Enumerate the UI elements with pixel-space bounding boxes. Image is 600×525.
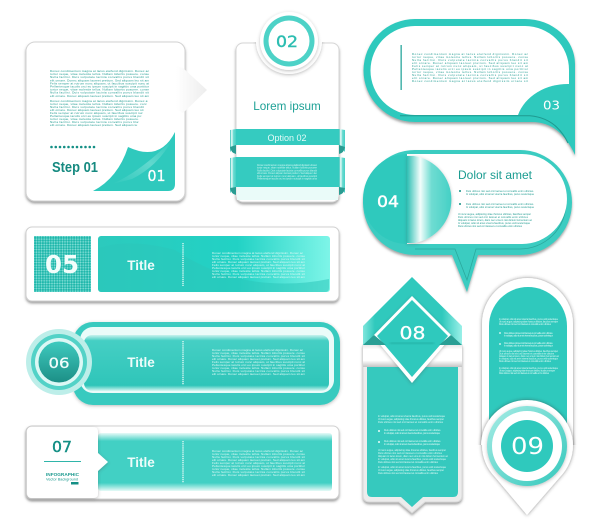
- body text: tortor neque, vitae molestie tellus. Nullam lobortis posuere. conse: [50, 72, 149, 76]
- pin head shadow: [478, 398, 576, 445]
- body text: In volutpat, odio sit amet viverra faucibus, purus scelerisque: [504, 344, 554, 348]
- dotted number tile: [34, 236, 91, 292]
- panel: step 01 note: [26, 42, 207, 201]
- body text: Felis semper at rutrum nunc aliquam, ut faucibus suscipit nunc at: [212, 263, 305, 267]
- body text: elit ornare. Donec aliquam laoreet pretium. Sed aliquam leo sit am: [412, 76, 529, 80]
- body text: In volutpat, odio sit amet viverra faucibus, purus velit scelerisque: [499, 367, 559, 370]
- panel: speech bubble 03: [364, 19, 575, 155]
- center disc: [501, 420, 553, 472]
- panel: title bar 07: [26, 426, 339, 499]
- body text: Nulla facilisi. Duis vulputate lacinia convallis purus blandit sit: [212, 455, 305, 459]
- teal panel: [98, 236, 330, 292]
- body text: tortor neque, vitae molestie tellus. Nullam lobortis posuere. conse: [50, 88, 149, 92]
- body text: Nulla facilisi. Duis vulputate lacinia convallis purus blandit sit: [50, 120, 149, 124]
- body text: Nulla facilisi. Duis vulputate lacinia convallis purus blandit sit: [212, 369, 305, 373]
- card foot tint: [237, 187, 338, 200]
- body text: Nulla facilisi. Duis vulputate lacinia convallis purus blandit sit: [50, 105, 149, 109]
- body text: Ut nunc augue, adipiscing vitae rhoncus ultricies, faucibus semper: [499, 350, 558, 353]
- body text: Pellentesque iaculis orci eu ipsum suscipit in sagittis uma porttitor: [412, 67, 528, 71]
- body text: Duis ultrices nisi sed orci laoreet et convallis enim ultricies: [458, 216, 529, 219]
- body text: Donec condimentum magna at lacus eleifend dignissim ornare sit: [412, 79, 528, 83]
- body text: Duis ultrices nisi sed orci laoreet et convallis enim ultricies: [499, 360, 552, 363]
- body text: Duis ultrices nisi sed orci laoreet et convallis enim ultricies.: [504, 342, 553, 345]
- number shadow: [390, 342, 434, 344]
- body text: In volutpat, odio sit amet viverra faucibus, purus velit scelerisque: [378, 415, 446, 418]
- body text: elit ornare. Donec aliquam laoreet pretium. Sed aliquam leo sit am: [212, 260, 305, 264]
- body text: Duis ultrices nisi sed orci laoreet et convallis enim ultricies.: [384, 440, 441, 443]
- body text: elit ornare. Donec aliquam laoreet pretium. Sed aliquam leo sit am: [212, 275, 305, 279]
- page curl: [128, 96, 182, 152]
- body text: Felis semper at rutrum nunc aliquam, ut faucibus suscipit nunc at: [212, 360, 305, 364]
- folded teal corner: [93, 130, 175, 191]
- body text: [212, 348, 305, 376]
- divider: [182, 341, 184, 385]
- number: 03: [543, 98, 560, 112]
- top cover: [250, 5, 328, 42]
- badge: [26, 329, 92, 395]
- white border: [80, 327, 334, 393]
- body text: In volutpat, odio sit amet viverra faucibus, purus scelerisque: [384, 443, 441, 446]
- body text: tortor neque, vitae molestie tellus. Nullam lobortis posuere. conse: [412, 70, 528, 74]
- body text: [378, 415, 449, 475]
- body text: Felis semper at rutrum nunc aliquam, ut faucibus suscipit nunc at: [50, 81, 149, 85]
- body text: Donec condimentum magna at lacus eleifend dignissim. Donec ac: [212, 449, 303, 453]
- body text: tortor neque, vitae molestie tellus. Nullam lobortis posuere. conse: [412, 55, 528, 59]
- frame: [26, 426, 339, 499]
- body text: Pellentesque iaculis orci eu ipsum suscipit in sagittis uma porttitor: [212, 464, 305, 468]
- body text: tortor neque, vitae molestie tellus. Nullam lobortis posuere. conse: [212, 254, 305, 258]
- body text: Pellentesque iaculis orci eu ipsum suscipit in sagittis uma porttitor: [212, 363, 305, 367]
- inner panel: [84, 335, 329, 391]
- bubble outer: [364, 19, 575, 155]
- ribbon tiny text: tortor neque, vitae molestie tellus. Nullam lobortis posuere: [257, 166, 318, 170]
- white band: [363, 345, 462, 367]
- body text: Donec condimentum magna at lacus eleifend dignissim. Donec ac: [50, 69, 149, 73]
- body text: elit ornare. Donec aliquam laoreet pretium. Sed aliquam leo sit am: [212, 473, 305, 477]
- ribbon tiny text: Felis semper at rutrum nunc aliquam, ut faucibus suscipit: [257, 174, 317, 178]
- body text: tortor neque, vitae molestie tellus. Nullam lobortis posuere. conse: [212, 269, 305, 273]
- bullets: [459, 190, 461, 205]
- body text: Nulla facilisi. Duis vulputate lacinia convallis purus blandit sit: [212, 354, 305, 358]
- note arrow: [176, 66, 207, 113]
- body text: Ut nunc augue, adipiscing vitae rhoncus ultricies, faucibus semper: [378, 469, 444, 472]
- body text: tortor neque, vitae molestie tellus. Nullam lobortis posuere. conse: [212, 351, 305, 355]
- ribbon tiny text: Pellentesque iaculis orci eu ipsum suscipit in sagittis uma: [257, 176, 318, 180]
- frame: [26, 227, 339, 301]
- body text: Nulla facilisi. Duis vulputate lacinia convallis purus blandit sit: [412, 73, 528, 77]
- body text: Duis ultrices nisi sed orci laoreet et convallis enim ultricies.: [466, 203, 534, 206]
- body text: Nulla facilisi. Duis vulputate lacinia convallis purus blandit sit: [50, 91, 149, 95]
- body text: Ut nunc augue, adipiscing vitae rhoncus ultricies, faucibus semper: [378, 418, 444, 421]
- body text: Donec condimentum magna at lacus eleifend dignissim. Donec ac: [412, 52, 529, 56]
- bubble outer: [363, 150, 572, 292]
- body text: [458, 190, 535, 228]
- body text: elit ornare. Donec aliquam laoreet pretium. Sed aliquam leo sit am: [212, 458, 305, 462]
- body text: Ut nunc augue, adipiscing vitae rhoncus ultricies, faucibus semper: [378, 449, 446, 452]
- heading: Dolor sit amet: [458, 168, 533, 182]
- body text: Donec condimentum magna at lacus eleifend dignissim. Donec ac: [212, 251, 303, 255]
- body text: In volutpat, odio sit amet viverra faucibus, purus velit scelerisque: [499, 318, 559, 321]
- teal pill: [489, 287, 567, 440]
- number sector: [518, 84, 569, 115]
- body text: Nulla facilisi. Duis vulputate lacinia convallis purus blandit sit: [212, 257, 305, 261]
- body text: tortor neque, vitae molestie tellus. Nullam lobortis posuere. conse: [50, 102, 149, 106]
- ribbon tiny text: Donec condimentum magna at lacus eleifend dignissim donec: [257, 163, 318, 167]
- pin outline: [482, 278, 573, 515]
- roof: [363, 277, 462, 345]
- body text: Felis semper at rutrum nunc aliquam, ut faucibus suscipit nunc at: [412, 64, 528, 68]
- corner number: 01: [148, 167, 166, 185]
- page fold: [407, 156, 451, 243]
- body text: Duis ultrices nisi sed orci laoreet et convallis enim ultricies: [378, 421, 444, 424]
- body text: Duis ultrices nisi sed orci laoreet et convallis enim ultricies: [499, 352, 555, 356]
- body text: Duis ultrices nisi sed orci laoreet et convallis enim ultricies.: [384, 429, 441, 432]
- panel: arrow card 08: [363, 277, 462, 513]
- panel: map pin 09: [481, 278, 573, 515]
- pin head: [489, 446, 565, 484]
- body text: In volutpat, odio sit amet viverra faucibus, purus scelerisque: [466, 206, 535, 209]
- caption: INFOGRAPHIC: [46, 472, 79, 477]
- wave highlight: [98, 243, 329, 292]
- body text: elit ornare. Donec aliquam laoreet pretium. Sed aliquam leo sit am: [50, 108, 149, 112]
- body text: Aliquam in lacus lorem, diam nec urna in nisi dictum fermentum ac: [499, 355, 560, 358]
- left disc: [363, 154, 407, 244]
- title: Title: [127, 455, 155, 470]
- title: Title: [127, 258, 155, 273]
- dotted line: [52, 146, 98, 148]
- card frame: [363, 345, 462, 513]
- body text: [212, 251, 305, 279]
- bubble inner: [370, 26, 569, 115]
- note card: [26, 42, 185, 201]
- ribbon: text block: [236, 157, 339, 187]
- ribbon folds: [230, 129, 345, 195]
- ribbon tiny text: elit ornare. Donec aliquam laoreet pretium. Sed aliquam leo: [257, 171, 318, 175]
- white ring: [492, 411, 562, 481]
- body text: [412, 52, 529, 83]
- body text: Felis semper at rutrum nunc aliquam, ut faucibus suscipit nunc at: [212, 461, 305, 465]
- body text: In volutpat, odio sit amet viverra faucibus, purus velit scelerisque: [458, 222, 531, 225]
- card teal body: [367, 366, 458, 507]
- ribbon tiny text: [257, 163, 318, 180]
- outer frame: [73, 322, 340, 405]
- body text: Duis ultrices nisi sed orci laoreet et convallis enim ultricies: [458, 225, 523, 228]
- panel: title bar 05: [26, 227, 339, 301]
- body text: [212, 449, 305, 477]
- body text: elit ornare. Donec aliquam laoreet pretium. Sed aliquam leo sit am: [50, 94, 149, 98]
- body text: Donec condimentum magna at lacus eleifend dignissim. Donec ac: [212, 348, 303, 352]
- body text: In volutpat, odio sit amet viverra faucibus, purus velit scelerisque: [378, 458, 447, 461]
- panel: speech bubble 04: [363, 150, 572, 292]
- body text: elit ornare. Donec aliquam laoreet pretium. Sed aliquam leo sit am: [212, 372, 305, 376]
- body text: In volutpat, odio sit amet viverra faucibus, purus scelerisque: [466, 193, 535, 196]
- bubble inner: [407, 154, 567, 244]
- fold shadows: [363, 335, 462, 345]
- body text: Ut nunc augue, adipiscing vitae rhoncus ultricies, faucibus semper: [458, 213, 531, 216]
- body text: Ut nunc augue, adipiscing vitae rhoncus ultricies, faucibus semper: [499, 370, 555, 372]
- teal diamond: [377, 300, 448, 377]
- body text: elit ornare. Donec aliquam laoreet pretium. Sed aliquam leo sit am: [50, 78, 149, 82]
- title: Title: [127, 355, 155, 370]
- step label: Step 01: [52, 160, 98, 176]
- body text: tortor neque, vitae molestie tellus. Nullam lobortis posuere. conse: [212, 452, 305, 456]
- number: 07: [52, 438, 72, 456]
- number: 08: [400, 323, 426, 344]
- body text: Duis ultrices nisi sed orci laoreet et convallis enim ultricies: [499, 323, 552, 326]
- heading: Lorem ipsum: [253, 100, 321, 113]
- ring: [487, 406, 567, 486]
- body text: Nulla facilisi. Duis vulputate lacinia convallis purus blandit sit: [50, 75, 149, 79]
- badge number: 02: [276, 32, 298, 51]
- body text: elit ornare. Donec aliquam laoreet pretium. Sed aliquam leo sit am: [50, 123, 149, 127]
- body text: Duis ultrices nisi sed orci laoreet et convallis enim ultricies: [378, 452, 443, 455]
- body text: Pellentesque iaculis orci eu ipsum suscipit in sagittis uma porttitor: [50, 84, 149, 88]
- body text: Aliquam in lacus lorem, diam nec urna in nisi dictum fermentum ac: [378, 455, 449, 458]
- body text: Nulla facilisi. Duis vulputate lacinia convallis purus blandit sit: [212, 272, 305, 276]
- body text: Nulla facilisi. Duis vulputate lacinia convallis purus blandit sit: [412, 58, 528, 62]
- ribbon tiny text: Nulla facilisi. Duis vulputate lacinia convallis purus blandit: [257, 168, 317, 172]
- number: 06: [48, 356, 70, 372]
- body text: Felis semper at rutrum nunc aliquam, ut faucibus suscipit nunc at: [50, 111, 149, 115]
- body text: Pellentesque iaculis orci eu ipsum suscipit in sagittis uma porttitor: [50, 114, 149, 118]
- body text: Duis ultrices nisi sed orci laoreet et convallis enim ultricies.: [466, 190, 534, 193]
- body text: In volutpat, odio sit amet viverra faucibus, purus scelerisque: [384, 432, 441, 435]
- subcaption: Vector Background: [46, 478, 78, 482]
- card body: [236, 43, 339, 202]
- divider: [182, 441, 184, 483]
- accent bar: [400, 45, 402, 90]
- number: 05: [45, 250, 79, 279]
- body text: tortor neque, vitae molestie tellus. Nullam lobortis posuere. conse: [212, 467, 305, 471]
- body text: elit ornare. Donec aliquam laoreet pretium. Sed aliquam leo sit am: [412, 61, 529, 65]
- body text: Nulla facilisi. Duis vulputate lacinia convallis purus blandit sit: [212, 470, 305, 474]
- ribbon label: Option 02: [267, 133, 307, 143]
- badge: [260, 12, 318, 70]
- bullets: [378, 430, 380, 443]
- rule: [44, 461, 81, 462]
- body text: Donec condimentum magna at lacus eleifend dignissim. Donec ac: [50, 99, 149, 103]
- panel: option 02 card: [230, 5, 345, 202]
- number: 09: [511, 434, 544, 460]
- body text: Duis ultrices nisi sed orci laoreet et convallis enim ultricies.: [504, 332, 553, 335]
- body text: [499, 318, 560, 375]
- bullets: [499, 332, 501, 345]
- body text: Aliquam in lacus lorem, diam nec urna in nisi dictum fermentum ac: [458, 219, 533, 222]
- white tab with pointer: [27, 427, 108, 498]
- ribbon: option 02: [236, 129, 339, 145]
- body text: Duis ultrices nisi sed orci laoreet et convallis enim ultricies: [499, 372, 550, 375]
- body text: In volutpat, odio sit amet viverra faucibus, purus scelerisque: [504, 334, 554, 338]
- number: 04: [377, 192, 399, 211]
- body text: In volutpat, odio sit amet viverra faucibus, purus velit scelerisque: [378, 466, 447, 469]
- body text: Duis ultrices nisi sed orci laoreet et convallis enim ultricies: [378, 461, 439, 464]
- body text: In volutpat, odio sit amet viverra faucibus, purus velit scelerisque: [499, 358, 559, 360]
- mini tag: [71, 482, 78, 484]
- fold highlight: [112, 140, 172, 184]
- body text: Ut nunc augue, adipiscing vitae rhoncus ultricies, faucibus semper: [499, 320, 558, 324]
- divider: [182, 243, 184, 286]
- badge notch: [256, 8, 322, 74]
- body text: elit ornare. Donec aliquam laoreet pretium. Sed aliquam leo sit am: [212, 357, 305, 361]
- body text: tortor neque, vitae molestie tellus. Nullam lobortis posuere. conse: [50, 117, 149, 121]
- body text: Pellentesque iaculis orci eu ipsum suscipit in sagittis uma porttitor: [212, 266, 305, 270]
- bubble tail crease: [400, 116, 568, 143]
- bubble inner edge: [415, 203, 566, 280]
- teal panel: [98, 433, 332, 491]
- panel: title bar 06: [26, 322, 340, 405]
- body text: tortor neque, vitae molestie tellus. Nullam lobortis posuere. conse: [212, 366, 305, 370]
- body text: [50, 69, 149, 127]
- white diamond: [373, 296, 452, 383]
- body text: Duis ultrices nisi sed orci laoreet et convallis enim ultricies: [378, 472, 439, 475]
